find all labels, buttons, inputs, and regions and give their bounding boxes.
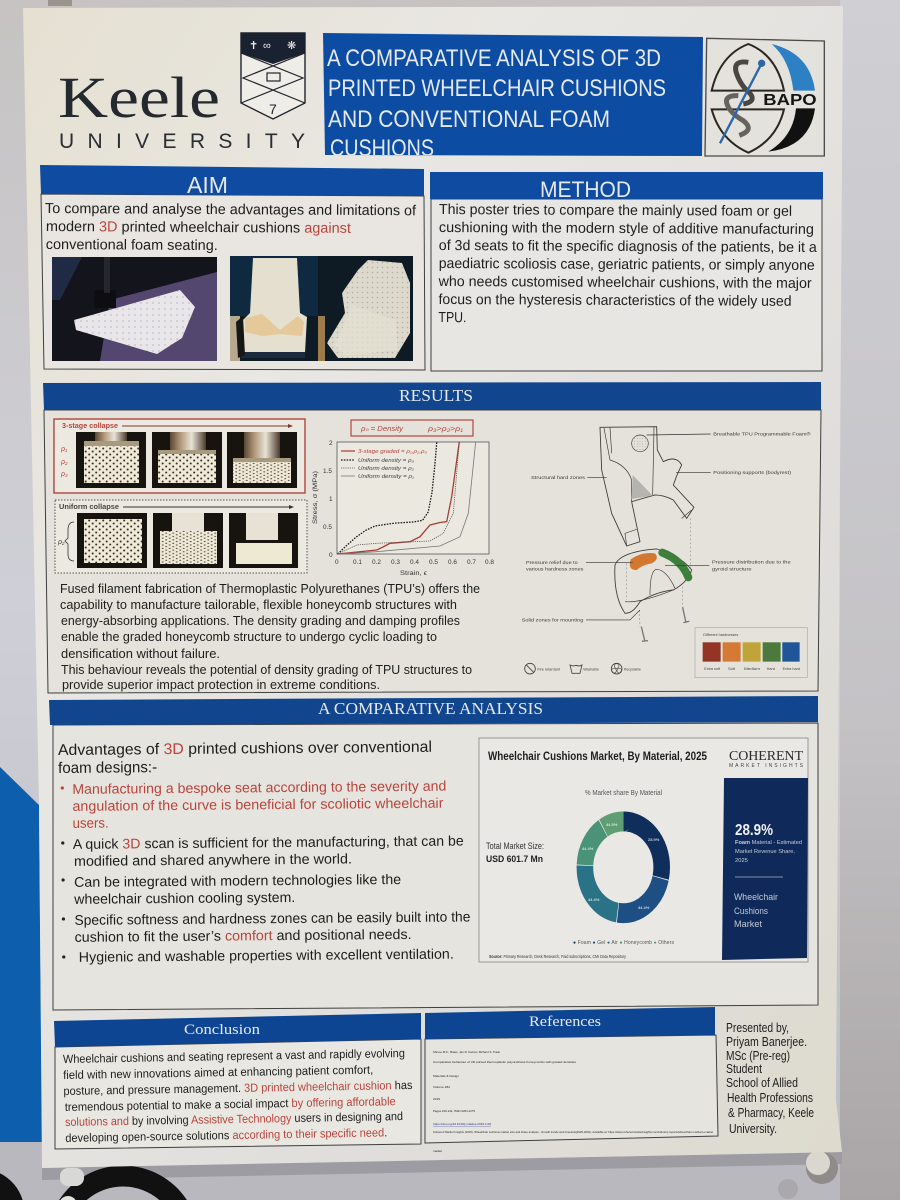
results text: densification without failure. [61, 646, 220, 661]
chart axes labels: 0.1 [353, 559, 362, 566]
chart axes labels: 1.5 [323, 468, 332, 475]
chart axes labels [312, 440, 494, 577]
crest shield: ✝ [249, 40, 258, 52]
icon: fire retardant [525, 663, 560, 674]
method heading: METHOD [540, 177, 631, 202]
method text: This poster tries to compare the mainly used foam or gel [439, 202, 792, 220]
conclusion text: field with new innovations aimed at enhancing patient comfort, [63, 1063, 373, 1082]
title banner: CUSHIONS [330, 135, 434, 162]
presenter credit: Priyam Banerjee. [726, 1035, 807, 1049]
advantages text: Hygienic and washable properties with excellent ventilation. [79, 946, 454, 965]
chart legend: Uniform density = ρ₁ [358, 474, 414, 480]
logo: BAPO [705, 38, 824, 156]
references heading: References [529, 1014, 601, 1030]
market share figure [479, 738, 808, 962]
aim text: modern 3D printed wheelchair cushions against [46, 219, 351, 237]
diagram labels: Solid zones for mounting [522, 618, 584, 623]
results heading: RESULTS [399, 386, 473, 405]
results text: enable the graded honeycomb structure to undergo cyclic loading to [61, 629, 437, 644]
diagram labels: Pressure relief due to [526, 560, 578, 565]
aim heading: AIM [187, 172, 228, 198]
advantages text [58, 738, 471, 965]
results text [60, 581, 480, 692]
chart legend: 3-stage graded = ρ₁,ρ₂,ρ₃ [358, 449, 427, 455]
method text: of 3d seats to fit the specific diagnosis of the patients, be it a [439, 238, 818, 256]
side panel: key figure: Cushions [734, 906, 768, 917]
donut labels: 44.4% [588, 897, 600, 902]
method text: who needs customised wheelchair cushions, with the major [438, 274, 812, 292]
advantages text: Advantages of 3D printed cushions over conventional [58, 739, 432, 759]
presenter credit: & Pharmacy, Keele [728, 1106, 814, 1120]
donut chart [585, 821, 662, 913]
chart axes labels: 0.4 [410, 559, 419, 566]
figure: uniform collapse: ρ₂ [57, 539, 65, 546]
panel: aim [40, 165, 425, 370]
donut legend: ● Foam ● Gel ● Air ● Honeycomb ● Others [573, 940, 674, 946]
advantages text: wheelchair cushion cooling system. [73, 889, 295, 907]
results text: capability to manufacture tailorable, flexible honeycomb structures with [60, 597, 457, 612]
donut labels: 44.4% [582, 846, 594, 851]
conclusion text: solutions and by involving Assistive Technology users in designing and [65, 1109, 403, 1129]
method text: focus on the hysteresis characteristics of the widely used [439, 292, 792, 310]
method text: paediatric scoliosis case, geriatric patients, or simply anyone [439, 256, 815, 274]
method text [437, 202, 818, 328]
figure title: Wheelchair Cushions Market, By Material, 2025 [488, 751, 708, 763]
wordmark [58, 65, 305, 153]
coherent logo: MARKET INSIGHTS [729, 763, 804, 769]
title banner: A COMPARATIVE ANALYSIS OF 3D [327, 45, 661, 72]
total market size [486, 841, 544, 864]
figure: 3-stage collapse: 3-stage collapse [62, 421, 118, 430]
wordmark: UNIVERSITY [59, 130, 305, 153]
results text: energy-absorbing applications. The density grading and damping profiles [61, 613, 460, 628]
legend: hardness swatches: Different hardnesses [703, 633, 738, 637]
icon: recyclable [611, 663, 641, 674]
icon: washable: Washable [583, 667, 599, 671]
crest shield: ❋ [287, 40, 296, 52]
chart axes labels: 0.2 [372, 559, 381, 566]
results text: This behaviour reveals the potential of density grading of TPU structures to [61, 662, 472, 677]
legend: hardness swatches [695, 628, 807, 678]
conclusion text: tremendous potential to make a social impact by offering affordable [65, 1094, 396, 1114]
chart axes labels: 0.7 [467, 559, 476, 566]
advantages text: modified and shared anywhere in the world. [74, 850, 352, 869]
figure: 3-stage collapse: ρ₃ [60, 471, 68, 478]
legend: hardness swatches: Medium [744, 667, 760, 671]
references text: Materials & Design [433, 1074, 459, 1078]
conclusion text: posture, and pressure management. 3D printed wheelchair cushion has [63, 1078, 413, 1098]
figure: 3-stage collapse: ρ₂ [60, 459, 68, 466]
chart axes labels: Stress, σ (MPa) [312, 471, 319, 524]
advantages text: cushion to fit the user’s comfort and positional needs. [75, 926, 412, 945]
references text: market [433, 1149, 442, 1153]
chart axes labels: Strain, ϵ [400, 570, 427, 577]
advantages text: angulation of the curve is beneficial for scoliotic wheelchair [72, 795, 444, 814]
presenter credit [726, 1021, 814, 1136]
title banner: AND CONVENTIONAL FOAM [328, 106, 610, 133]
subtitle: % Market share By Material [585, 790, 662, 797]
panel: references [425, 1007, 718, 1153]
figure: 3-stage collapse: ρ₁ [60, 446, 68, 453]
references text: Volume 182 [433, 1085, 451, 1089]
panel: comparative analysis [49, 696, 818, 1010]
density key: ρₙ = Density [360, 424, 404, 433]
presenter credit: Student [726, 1062, 762, 1076]
donut labels [582, 822, 660, 910]
side panel: key figure [722, 778, 808, 960]
side panel: key figure: 28.9% [735, 822, 773, 839]
chart axes labels: 0.6 [448, 559, 457, 566]
total market size: Total Market Size: [486, 841, 544, 851]
method heading [430, 172, 823, 202]
photo: chair and contoured cushion [230, 256, 413, 361]
diagram labels: Positioning supports (bodyrest) [713, 470, 792, 475]
conclusion heading: Conclusion [184, 1022, 261, 1038]
panel: method [430, 172, 823, 371]
aim text [45, 201, 417, 255]
title banner [323, 33, 703, 162]
chart axes labels: 0.8 [485, 559, 494, 566]
results text: Fused filament fabrication of Thermoplastic Polyurethanes (TPU’s) offers the [60, 581, 480, 596]
advantages text: A quick 3D scan is sufficient for the manufacturing, that can be [73, 832, 464, 852]
advantages text: Can be integrated with modern technologies like the [74, 871, 401, 890]
chart legend: Uniform density = ρ₂ [358, 466, 414, 472]
presenter credit: School of Allied [726, 1076, 798, 1090]
source note: Source: Primary Research, Desk Research, Paid subscriptions, CMI Data Repository [489, 954, 627, 959]
advantages text: Specific softness and hardness zones can be easily built into the [74, 908, 471, 928]
legend: hardness swatches: Extra hard [783, 667, 800, 671]
side panel: key figure: Wheelchair [734, 892, 778, 903]
density key [351, 420, 473, 436]
references text: Comparative behaviour of 3D printed thermoplastic polyurethane honeycombs with graded densities [433, 1060, 577, 1064]
conclusion text: Wheelchair cushions and seating represent a vast and rapidly evolving [63, 1046, 405, 1066]
side panel: key figure: Foam Material - Estimated [735, 840, 802, 846]
donut labels: 28.9% [648, 837, 660, 842]
chart axes labels: 0.5 [429, 559, 438, 566]
results text: provide superior impact protection in extreme conditions. [62, 677, 380, 692]
comparative heading [49, 696, 818, 725]
diagram labels [522, 431, 812, 623]
method text: cushioning with the modern style of additive manufacturing [439, 220, 814, 238]
side panel: key figure: Market Revenue Share, [735, 849, 795, 855]
diagram labels: Structural hard zones [531, 475, 585, 480]
figure: 3-stage collapse [54, 419, 305, 493]
coherent logo: COHERENT [729, 749, 803, 764]
presenter credit: MSc (Pre-reg) [726, 1049, 790, 1063]
figure: uniform collapse [55, 500, 307, 573]
crest shield: ∞ [263, 40, 271, 52]
aim text: conventional foam seating. [46, 237, 218, 254]
legend: hardness swatches: Hard [767, 667, 775, 671]
stress-strain chart [312, 440, 494, 577]
title banner: PRINTED WHEELCHAIR CUSHIONS [328, 75, 666, 102]
diagram: cushion zones [522, 427, 812, 678]
references text: Pages 100-142, ISSN 0264-1275 [433, 1109, 475, 1113]
icon: washable [570, 665, 599, 673]
chart axes labels: 0.3 [391, 559, 400, 566]
references text: 2019 [433, 1097, 440, 1101]
legend: hardness swatches: Soft [728, 667, 735, 671]
references text: Shinoo M.K., Bates, Jan R. Farrow, Richard S. Trask [433, 1050, 501, 1054]
chart axes labels: 2 [329, 440, 333, 447]
donut labels: 44.4% [638, 905, 650, 910]
diagram labels: Breathable TPU Programmable Foam® [713, 431, 812, 436]
crest shield: 7 [269, 101, 277, 117]
references text: Coherent Market Insights (2025). Wheelchair cushions market size and share analysis - Growth trends and forecasts(2025-2032). Available at: https://www.coherentmarketinsights.com/industry-reports/wheelchair-cushions-market [433, 1130, 713, 1134]
chart legend: Uniform density = ρ₃ [358, 458, 414, 464]
references text: https://doi.org/10.1016/j.matdes.2019.1.08 [433, 1122, 491, 1126]
presenter credit: Presented by, [726, 1021, 789, 1035]
conclusion text [63, 1046, 413, 1145]
presenter credit: Health Professions [727, 1091, 813, 1105]
advantages text: Manufacturing a bespoke seat according to the severity and [72, 778, 446, 797]
panel: conclusion [54, 1013, 421, 1149]
comparative heading: A COMPARATIVE ANALYSIS [318, 699, 543, 718]
aim text: To compare and analyse the advantages and limitations of [45, 201, 417, 219]
chart axes labels: 1 [329, 496, 333, 503]
logo: BAPO: BAPO [763, 92, 817, 109]
aim heading [40, 165, 424, 198]
total market size: USD 601.7 Mn [486, 854, 543, 864]
legend: hardness swatches: Extra soft [704, 667, 720, 671]
advantages text: foam designs:- [58, 759, 157, 777]
conclusion heading [54, 1013, 421, 1047]
logo: Keele University [58, 33, 305, 153]
side panel: key figure: Market [734, 919, 762, 930]
presenter credit: University. [729, 1122, 777, 1136]
diagram labels: various hardness zones [526, 567, 583, 572]
references heading [425, 1007, 715, 1039]
panel: results [43, 382, 821, 693]
icon: recyclable: Recyclable [624, 667, 641, 671]
icon: fire retardant: Fire retardant [537, 667, 560, 671]
chart axes labels: 0.5 [323, 524, 332, 531]
method text: TPU. [438, 310, 466, 326]
figure: uniform collapse: Uniform collapse [59, 502, 119, 511]
diagram labels: Pressure distribution due to the [712, 559, 791, 564]
donut labels: 44.5% [606, 822, 618, 827]
side panel: key figure: 2025 [735, 858, 748, 864]
chart axes labels: 0 [329, 552, 333, 559]
crest shield [241, 33, 305, 119]
results heading [43, 382, 821, 410]
conclusion text: developing open-source solutions according to their specific need. [65, 1125, 387, 1145]
diagram labels: gyroid structure [712, 567, 752, 572]
chart legend [341, 449, 427, 480]
photo: 3D printer printing cushion [52, 257, 217, 361]
advantages text: users. [73, 815, 109, 831]
density key: ρ₃>ρ₂>ρ₁ [427, 424, 464, 433]
chart axes labels: 0 [335, 559, 339, 566]
references text [433, 1050, 713, 1153]
wordmark: Keele [58, 65, 220, 130]
